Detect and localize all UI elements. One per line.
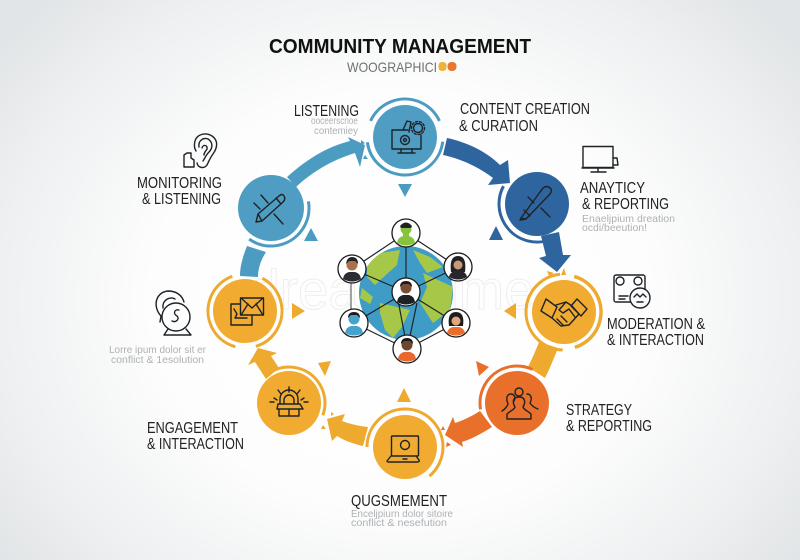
person: bottom (393, 335, 421, 363)
marker triangles (292, 140, 566, 447)
label: monitoring: MONITORING (137, 175, 222, 192)
label: listening: ooceerscnoe (311, 115, 358, 127)
label: monitoring: & LISTENING (142, 191, 221, 208)
icon: pencil (254, 194, 285, 224)
label: strategy: & REPORTING (566, 418, 652, 435)
node: monitoring (227, 164, 315, 252)
connecting lines (351, 233, 458, 349)
arrow: strategy to judgement (445, 411, 492, 447)
label: moderation (607, 316, 706, 349)
label: analytics: Enaeljpium dreation (582, 213, 675, 225)
person: lower left (340, 309, 368, 337)
label: engagement: & INTERACTION (147, 436, 244, 453)
label: judgement: Enceljpiurn dolor sitoire (351, 508, 453, 520)
label: engagement (147, 420, 244, 453)
icon: laptop (387, 436, 419, 462)
globe (359, 246, 453, 340)
icon: ear (184, 134, 217, 167)
center: globe network (338, 219, 472, 363)
label: judgement: conflict & nesefution (351, 517, 447, 529)
person: upper right (444, 253, 472, 281)
label: analytics: ocdi/beeution! (582, 222, 647, 234)
label: judgement: QUGSMEMENT (351, 493, 447, 510)
icon: handshake (541, 299, 587, 326)
arrow: analytics to moderation (539, 232, 571, 272)
icon: monitor and gears (392, 121, 424, 153)
label: analytics (580, 180, 675, 234)
node: analytics (485, 152, 589, 256)
label: listening: LISTENING (294, 103, 359, 120)
arrow: judgement to engagement (327, 414, 368, 446)
icon: envelopes (231, 298, 264, 325)
label: analytics: ANAYTICY (580, 180, 645, 197)
icon: alarm light (270, 387, 308, 416)
node: strategy (474, 360, 560, 446)
label: conflict note: conflict & 1esolution (111, 354, 204, 366)
icon: pen (520, 186, 552, 220)
label: engagement: ENGAGEMENT (147, 420, 238, 437)
connector: moderation to strategy (528, 342, 558, 378)
subtitle with dots: WOOGRAPHICI (347, 59, 437, 75)
label: judgement (351, 493, 453, 529)
person: upper left (338, 255, 366, 283)
label: listening (294, 103, 359, 137)
person: top (392, 219, 420, 247)
node: mail (195, 261, 295, 361)
label: conflict note: Lorre ipum dolor sit er (109, 344, 206, 356)
icon: monitor (582, 146, 618, 172)
title: COMMUNITY MANAGEMENT (269, 35, 531, 58)
label: content creation: & CURATION (459, 118, 538, 135)
icon: moderation panel (614, 275, 650, 308)
label: monitoring (137, 175, 222, 208)
label: strategy (566, 402, 652, 435)
node: engagement (239, 353, 339, 453)
node: judgement (367, 409, 443, 485)
label: listening: contemiey (314, 125, 359, 137)
icon: three people (502, 388, 538, 419)
node: moderation (518, 266, 610, 358)
label: analytics: & REPORTING (582, 196, 669, 213)
label: content creation: CONTENT CREATION (460, 101, 590, 118)
person: center (392, 278, 420, 306)
label: strategy: STRATEGY (566, 402, 632, 419)
label: content creation (459, 101, 590, 135)
node: content creation (355, 87, 455, 187)
text: dreamstime (250, 258, 534, 321)
label: conflict note (109, 344, 206, 366)
arrow: monitoring to listening (287, 137, 365, 187)
icon: speech bubbles (156, 291, 191, 335)
person: lower right (442, 309, 470, 337)
connector: mail to monitoring (240, 246, 266, 277)
arrow: content to analytics (443, 138, 510, 185)
label: moderation: & INTERACTION (607, 332, 704, 349)
label: moderation: MODERATION & (607, 316, 706, 333)
arrow: engagement to mail (248, 348, 279, 379)
